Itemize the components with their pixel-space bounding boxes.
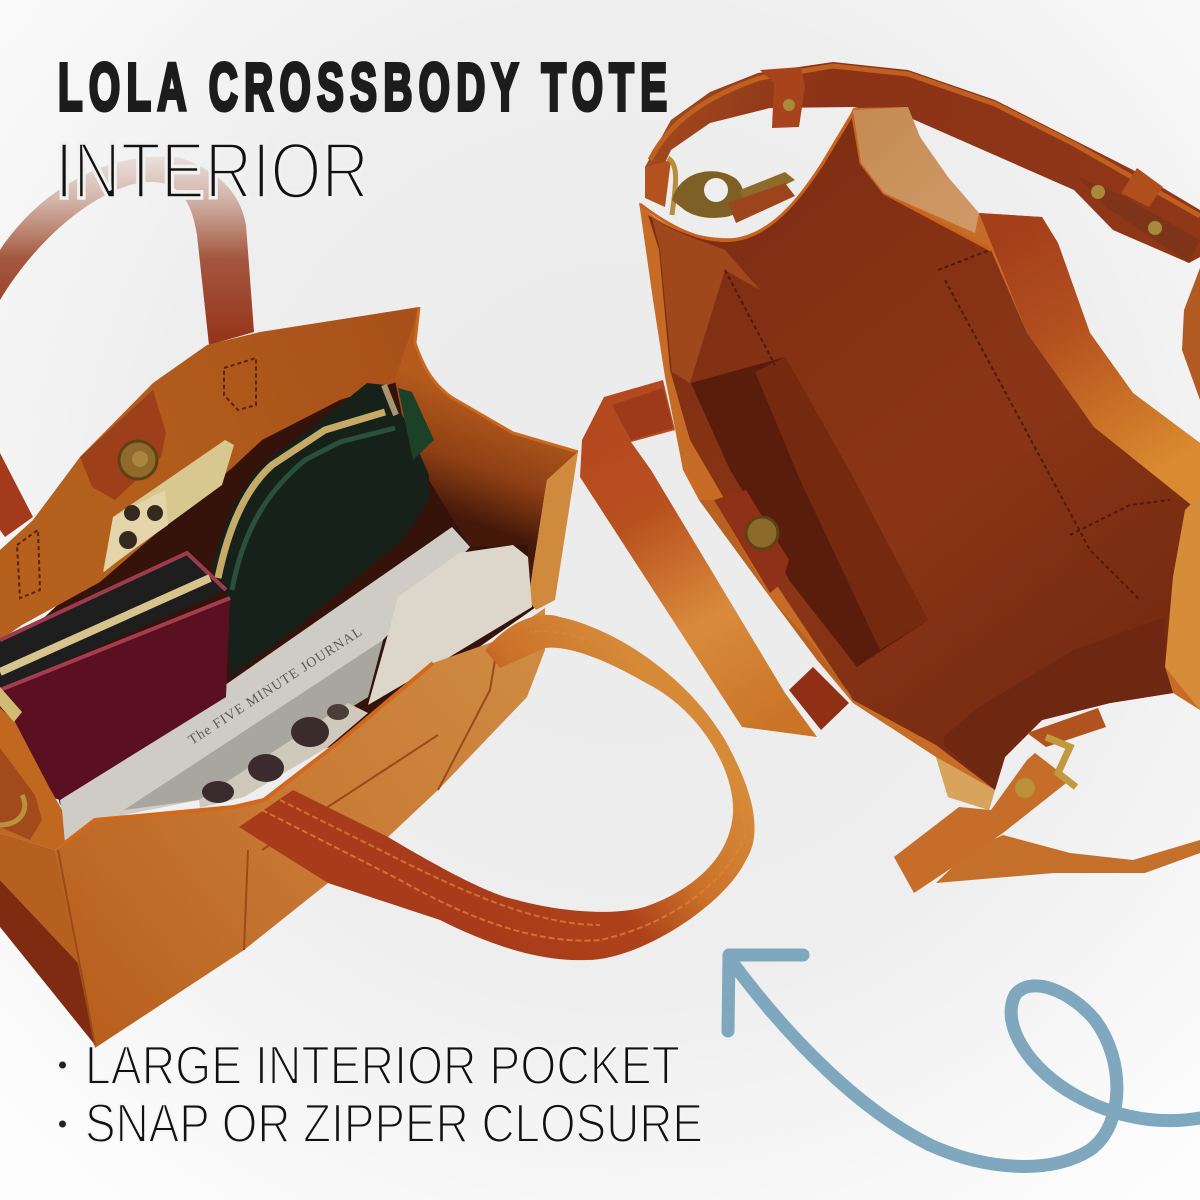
- left bag: dark interior: [20, 370, 536, 805]
- bottom strap buckle: [894, 753, 1070, 893]
- left bag: left back handle strand: [0, 453, 33, 537]
- arrow head: [728, 955, 803, 1031]
- icon: gold clasp: [0, 687, 22, 722]
- right bag: upper left lighter wall: [652, 218, 760, 383]
- right bag: outer rim: [639, 107, 1200, 810]
- left bag: back pocket flap: [80, 390, 166, 500]
- left bag: stitched tabs: [17, 358, 256, 598]
- right bag: lower suede lip: [944, 617, 1173, 790]
- left bag: strap holder: [0, 748, 42, 840]
- left bag: right inner wall: [395, 307, 578, 600]
- white pouch: [368, 545, 532, 705]
- strap inner section: [612, 388, 673, 440]
- right bag: stitching lines: [725, 250, 1170, 600]
- icon: snap button: [119, 441, 157, 479]
- right bag: bottom straps: [894, 753, 1200, 893]
- bullet list: [59, 1034, 703, 1154]
- left bag: front handle: [239, 615, 755, 960]
- bullet 1: LARGE INTERIOR POCKET: [85, 1034, 680, 1096]
- right bag: interior pocket: [691, 357, 928, 667]
- right bag: tan gusset top: [853, 107, 979, 233]
- left bag: side panel: [0, 833, 82, 967]
- left bag: handle stitching: [262, 631, 745, 941]
- icon: brass clip top: [668, 158, 795, 223]
- bottom strap long: [936, 835, 1200, 883]
- left bag: outer right panel: [528, 452, 578, 610]
- icon: brass clip bottom: [1046, 737, 1076, 787]
- book title: The FIVE MINUTE JOURNAL: [186, 624, 366, 748]
- left bag: front rim edge: [65, 663, 433, 843]
- icon: rivets: [783, 99, 1162, 235]
- arrow: [728, 955, 1200, 1166]
- ring tab: [645, 160, 671, 207]
- left bag: side strap and rim: [0, 708, 65, 850]
- strap tab: [1078, 177, 1200, 263]
- right bag: inner handle: [979, 213, 1200, 512]
- icon: rivet bottom: [1015, 778, 1035, 798]
- right bag: right gusset: [1165, 495, 1200, 710]
- title line 2: INTERIOR: [55, 126, 369, 215]
- right bag: top strap: [645, 62, 1200, 263]
- left bag: [0, 307, 755, 1048]
- left bag: lower dark gusset: [0, 880, 95, 1045]
- left bag: back handle: [0, 157, 254, 345]
- left bag: front seams: [58, 660, 495, 1045]
- icon: snap button right: [746, 517, 778, 549]
- right bag: pocket ribbed band: [755, 357, 928, 650]
- burgundy wallet: [0, 553, 230, 800]
- left bag: front panel: [55, 608, 545, 1048]
- right edge strap: [1182, 268, 1200, 400]
- right bag: snap flap: [714, 490, 789, 593]
- right bag: bottom corner tan: [936, 757, 995, 810]
- right bag: loose side strap: [580, 380, 849, 737]
- arrow shaft: [732, 962, 1200, 1166]
- left bag: rim highlight: [415, 307, 578, 452]
- right bag: bottom barrel: [1027, 708, 1106, 747]
- strap edge highlight: [650, 66, 1200, 216]
- right bag: lower pocket left strip: [699, 500, 853, 698]
- white book: [60, 527, 470, 845]
- green pouch: [212, 383, 434, 677]
- icon: side ring: [0, 795, 25, 825]
- right bag: [639, 107, 1200, 810]
- strap keeper 1: [760, 67, 805, 128]
- bullet 2: SNAP OR ZIPPER CLOSURE: [85, 1092, 703, 1154]
- title line 1: LOLA CROSSBODY TOTE: [58, 49, 667, 125]
- left bag: inner back wall: [0, 307, 419, 640]
- burgundy strap tab: [789, 667, 849, 730]
- patterned pouch: [199, 703, 368, 808]
- phone: [103, 440, 234, 572]
- strap keeper 2: [1121, 168, 1163, 207]
- right bag: interior: [648, 116, 1200, 790]
- title: [55, 49, 667, 215]
- right bag: top rim edge: [640, 113, 991, 250]
